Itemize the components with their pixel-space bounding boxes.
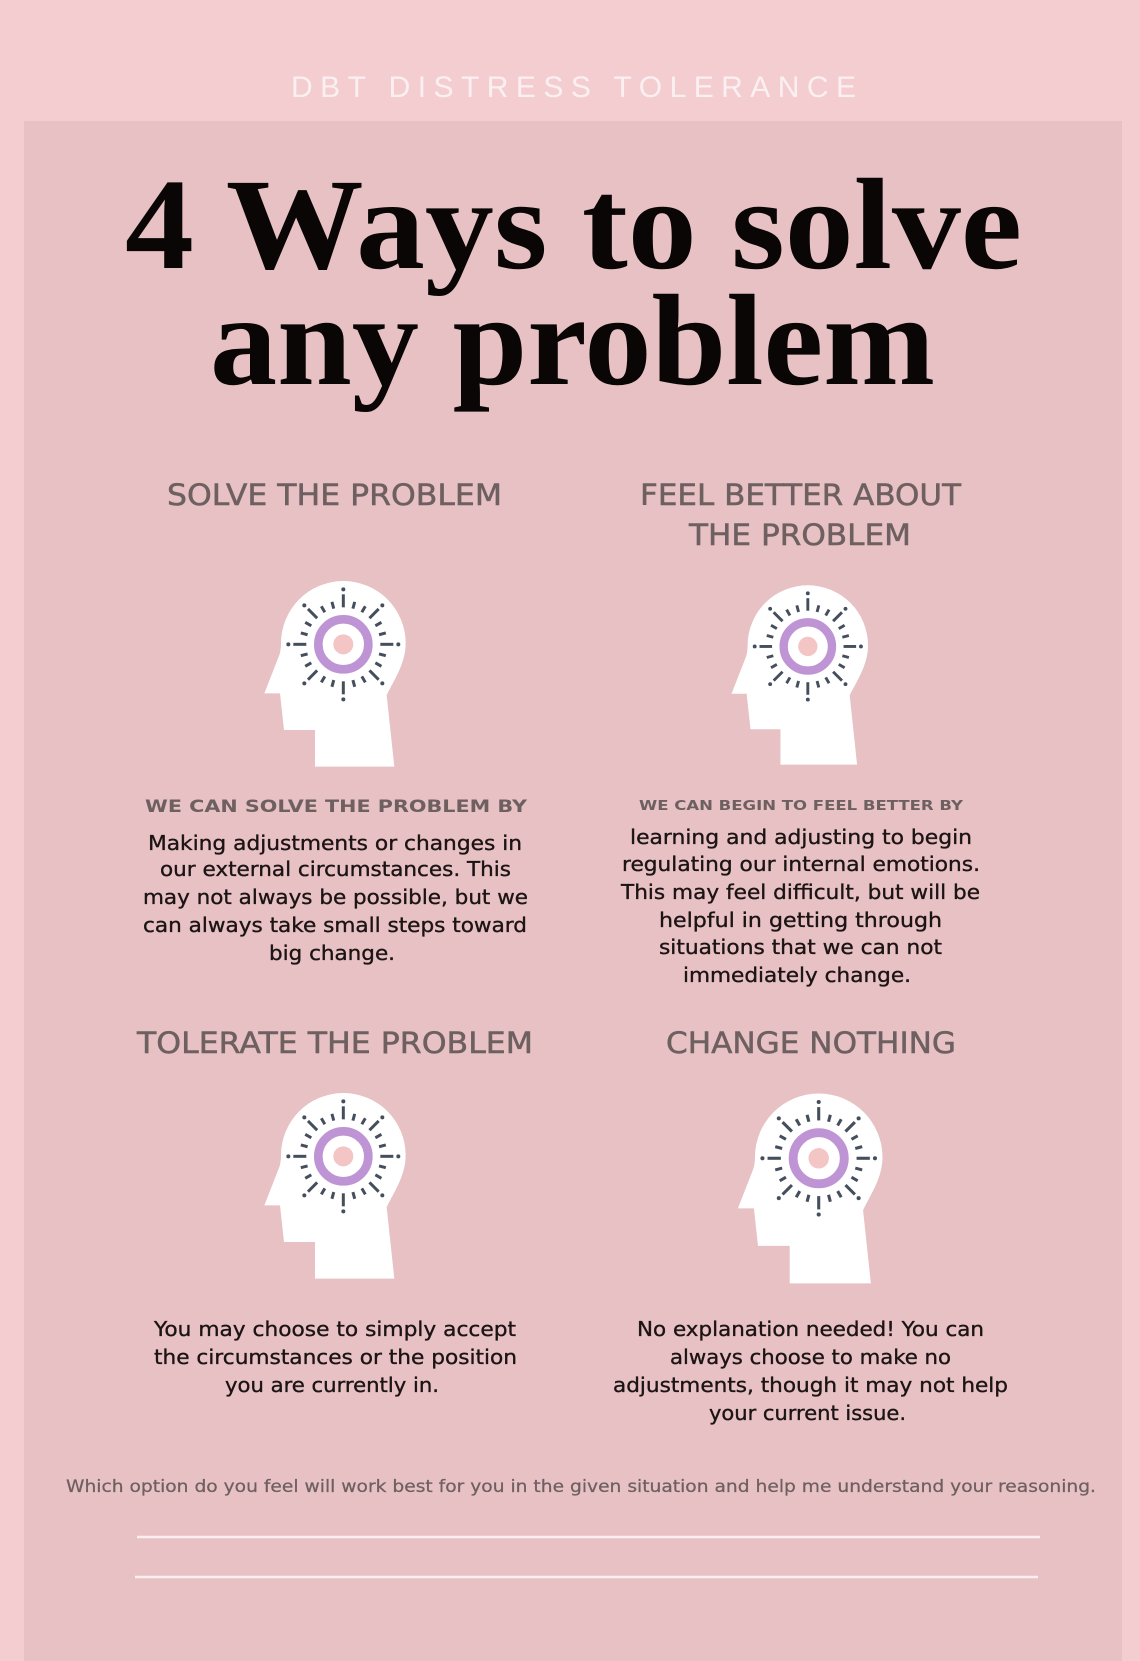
body text: tolerate: the circumstances or the position: [154, 1345, 517, 1369]
body text: feel better: This may feel difficult, but will be: [620, 880, 980, 904]
title: any problem: [210, 269, 935, 413]
subheading: we can solve the problem by: WE CAN SOLVE THE PROBLEM BY: [145, 797, 528, 816]
body text: solve the problem: [143, 831, 528, 965]
body text: feel better: [620, 825, 980, 987]
heading: change nothing: CHANGE NOTHING: [666, 1026, 956, 1060]
body text: solve the problem: Making adjustments or changes in: [148, 831, 522, 855]
body text: feel better: immediately change.: [683, 963, 911, 987]
icon: head with radiating target: [264, 581, 406, 767]
heading: solve the problem: SOLVE THE PROBLEM: [167, 478, 502, 512]
title: 4 Ways to solve: [125, 153, 1022, 297]
body text: tolerate: You may choose to simply accept: [153, 1317, 516, 1341]
icon: head with radiating target: [732, 585, 868, 765]
body text: solve the problem: our external circumstances. This: [160, 857, 511, 881]
body text: feel better: learning and adjusting to begin: [630, 825, 972, 849]
icon: head with radiating target: [738, 1093, 882, 1283]
body text: solve the problem: can always take small steps toward: [143, 913, 527, 937]
body text: feel better: regulating our internal emotions.: [622, 852, 980, 876]
body text: tolerate: [153, 1317, 517, 1397]
body text: feel better: situations that we can not: [659, 935, 942, 959]
section: feel better about the problem: [620, 478, 980, 987]
answer lines: [135, 1537, 1040, 1577]
icon: head with radiating target: [264, 1093, 406, 1279]
banner label: DBT Distress Tolerance: DBT DISTRESS TOLERANCE: [291, 71, 856, 104]
body text: tolerate: you are currently in.: [225, 1373, 439, 1397]
section: tolerate the problem: [136, 1026, 533, 1397]
heading: feel better about the problem: THE PROBLEM: [688, 518, 911, 552]
heading: feel better about the problem: [640, 478, 962, 552]
heading: feel better about the problem: FEEL BETTER ABOUT: [640, 478, 962, 512]
body text: change nothing: [613, 1317, 1008, 1425]
body text: change nothing: adjustments, though it may not help: [613, 1373, 1008, 1397]
body text: change nothing: always choose to make no: [670, 1345, 951, 1369]
subheading: we can begin to feel better by: WE CAN BEGIN TO FEEL BETTER BY: [639, 798, 963, 814]
body text: change nothing: No explanation needed! You can: [637, 1317, 984, 1341]
heading: tolerate the problem: TOLERATE THE PROBLEM: [136, 1026, 533, 1060]
body text: solve the problem: may not always be possible, but we: [143, 885, 528, 909]
section: change nothing: [613, 1026, 1008, 1425]
section: solve the problem: [143, 478, 528, 965]
body text: solve the problem: big change.: [269, 941, 395, 965]
body text: change nothing: your current issue.: [709, 1401, 906, 1425]
title: [125, 153, 1022, 413]
body text: feel better: helpful in getting through: [659, 908, 942, 932]
reflection question: Which option do you feel will work best for you in the given situation and help me understand your reasoning.: [66, 1477, 1096, 1497]
